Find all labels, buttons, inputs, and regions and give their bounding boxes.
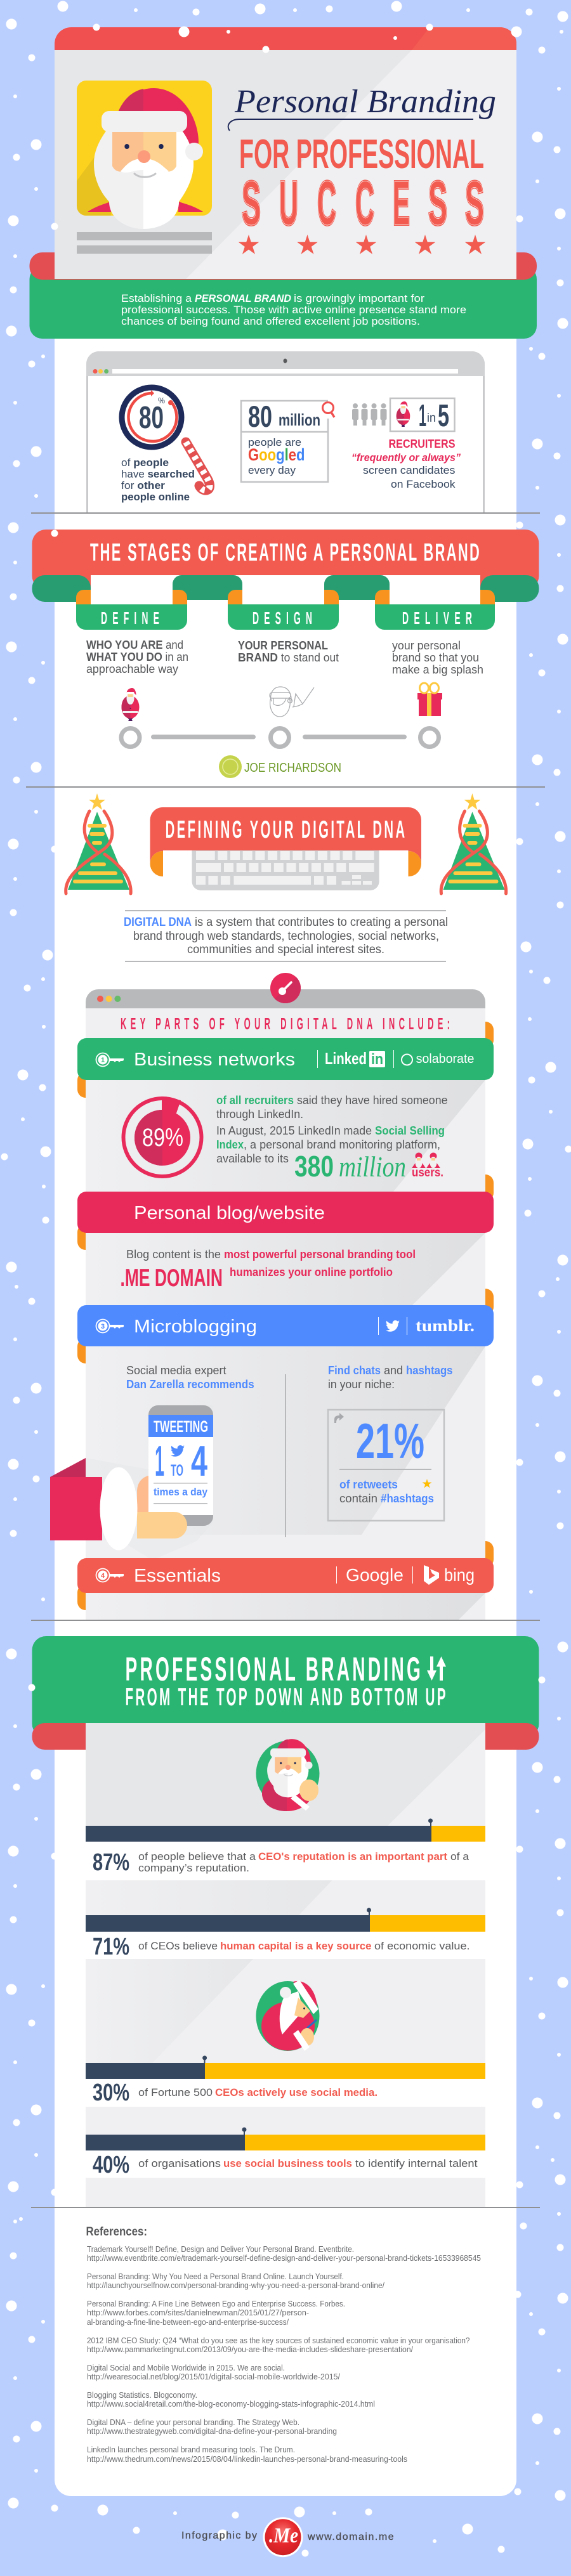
dna definition	[124, 910, 448, 962]
stat: 80 million: 80	[248, 400, 272, 433]
ribbon: essentials	[77, 1558, 494, 1593]
references	[86, 2225, 481, 2464]
stat: 21 percent: 21%	[356, 1413, 424, 1469]
stat: 80 percent: %	[158, 396, 165, 405]
panel: header	[29, 27, 537, 339]
icon: keyboard	[192, 850, 379, 890]
phone	[148, 1405, 213, 1526]
references heading: References:	[86, 2225, 147, 2239]
title: success: C	[355, 168, 374, 238]
stat: 40 percent: 40%	[93, 2152, 129, 2178]
stat: 71 percent: of economic value.	[374, 1940, 469, 1952]
stat: 80 million: million	[279, 410, 320, 429]
linkedin text: available to its	[216, 1152, 289, 1165]
icon: key 3: 3	[101, 1323, 105, 1330]
footer credit: www.domain.me	[307, 2532, 394, 2542]
header red top band	[55, 27, 516, 50]
ribbon: microblogging	[77, 1305, 494, 1346]
stat: 380 million users	[294, 1150, 443, 1183]
chart panel 2	[86, 1880, 485, 1932]
header ribbon green back	[29, 266, 537, 339]
header ribbon red flaps	[29, 252, 537, 280]
stat: 80 percent	[121, 387, 209, 503]
title: success: C	[317, 168, 336, 238]
panel: professional branding	[32, 1636, 539, 2208]
niche text: in your niche:	[328, 1378, 395, 1391]
stat: 80 million: people are	[248, 436, 301, 448]
chart panel 4	[86, 2107, 485, 2150]
deliver text: your personal	[392, 639, 461, 652]
references list: al-branding-a-fine-line-between-ego-and-enterprise-success/	[87, 2318, 289, 2327]
chart panel 3	[86, 1959, 485, 2079]
stat: 89 percent donut: 89%	[142, 1124, 183, 1152]
ribbon: microblogging: Microblogging	[134, 1317, 257, 1337]
stat: 40 percent	[93, 2152, 478, 2178]
blog text	[121, 1248, 416, 1292]
linkedin text: In August, 2015 LinkedIn made	[216, 1124, 372, 1137]
references list: Blogging Statistics. Blogconomy.	[87, 2391, 197, 2400]
stat: 80 percent: for other	[121, 479, 165, 491]
panel: digital dna	[66, 793, 506, 962]
linkedin text	[216, 1094, 448, 1165]
chart panel 5	[86, 2178, 485, 2208]
linkedin text: through LinkedIn.	[216, 1108, 303, 1121]
references list	[87, 2245, 481, 2464]
title: success: S	[428, 168, 447, 238]
title script: Personal Branding	[234, 84, 496, 120]
banner heading: PROFESSIONAL BRANDING	[126, 1651, 421, 1688]
niche text: hashtags	[406, 1364, 453, 1377]
dna banner	[150, 807, 421, 876]
dna definition: communities and special interest sites.	[187, 943, 384, 956]
intro text: professional success. Those with active online presence stand more	[121, 304, 466, 316]
define text	[86, 639, 188, 675]
title: success	[242, 168, 484, 238]
stat: 71 percent	[93, 1934, 469, 1960]
stat: 1 in 5 recruiters: in	[427, 412, 436, 425]
stat: 80 million: Googled	[248, 445, 305, 464]
references list: Digital DNA – define your personal branding. The Strategy Web.	[87, 2418, 299, 2427]
blog text: .ME DOMAIN	[121, 1265, 223, 1292]
stage label: deliver: DELIVER	[402, 608, 472, 628]
stage label: design	[228, 604, 339, 630]
icon: hand holding phone	[50, 1405, 213, 1560]
title: success: U	[279, 168, 298, 238]
define text: WHAT YOU DO in an	[86, 651, 188, 663]
stages banner: THE STAGES OF CREATING A PERSONAL BRAND	[90, 538, 480, 566]
avatar: santa waving	[256, 1739, 320, 1811]
logo: .me: .Me	[269, 2524, 298, 2547]
portrait card: santa	[77, 81, 212, 229]
phone: TO	[171, 1462, 183, 1480]
ribbon: business networks: Business networks	[134, 1050, 295, 1070]
logo: joe richardson	[219, 755, 341, 778]
icon: dna tree left	[66, 793, 131, 894]
references list: http://www.thedrum.com/news/2015/08/04/linkedin-launches-personal-brand-measuring-tools	[87, 2455, 407, 2464]
banner back	[32, 1636, 539, 1738]
stat: 87 percent: of people believe that a	[138, 1851, 256, 1863]
define text: approachable way	[86, 663, 178, 675]
niche text: Find chats	[328, 1364, 381, 1377]
stat: 87 percent: 87%	[93, 1849, 129, 1876]
tweet recommendation text	[126, 1364, 254, 1391]
define text: WHO YOU ARE and	[86, 639, 183, 651]
stat: 1 in 5 recruiters: on Facebook	[391, 478, 456, 490]
stat: 1 in 5 recruiters: 1	[419, 399, 426, 433]
references list: Personal Branding: A Fine Line Between Ego and Enterprise Success. Forbes.	[87, 2300, 345, 2308]
references list: Trademark Yourself! Define, Design and Deliver Your Personal Brand. Eventbrite.	[87, 2245, 354, 2254]
deliver text: make a big splash	[392, 663, 483, 676]
stat: 89 percent donut	[123, 1097, 202, 1176]
linkedin text: Index	[216, 1138, 244, 1151]
banner heading: FROM THE TOP DOWN AND BOTTOM UP	[126, 1683, 446, 1711]
phone: 4	[191, 1437, 207, 1485]
panel: header: S	[465, 168, 484, 238]
blog text: Blog content is the	[126, 1248, 221, 1261]
icon: key 3	[96, 1319, 124, 1333]
title: success: S	[242, 168, 261, 238]
references list: http://launchyourselfnow.com/personal-branding-why-you-need-a-personal-brand-online/	[87, 2281, 384, 2290]
stat: 80 percent: have searched	[121, 468, 195, 480]
ribbon: business networks: solaborate	[416, 1052, 474, 1066]
stat: 1 in 5 recruiters: RECRUITERS	[388, 438, 456, 450]
ribbon: personal blog	[77, 1192, 494, 1233]
icon: key 1: 1	[101, 1057, 105, 1064]
stat: 21 percent: contain	[339, 1492, 377, 1505]
references list: LinkedIn launches personal brand measuring tools. The Drum.	[87, 2445, 295, 2454]
phone: 1	[155, 1437, 164, 1485]
references list: Personal Branding: Why You Need a Personal Brand Online. Launch Yourself.	[87, 2272, 344, 2281]
panel: key parts browser	[50, 973, 494, 1620]
niche text: and	[384, 1364, 403, 1377]
banner red flaps	[32, 1723, 539, 1750]
linkedin text: , a personal brand monitoring platform,	[244, 1138, 440, 1151]
icon: sketched santa	[270, 687, 314, 717]
stat: 71 percent: human capital is a key source	[220, 1940, 372, 1952]
stat: 30 percent: CEOs actively use social media.	[215, 2086, 377, 2098]
ribbon: business networks: in	[371, 1051, 383, 1068]
phone: TWEETING	[154, 1418, 208, 1436]
linkedin text: said they have hired someone	[297, 1094, 448, 1107]
stat: 80 percent: of people	[121, 457, 169, 469]
stat: 21 percent	[328, 1410, 444, 1521]
stat: 87 percent: company’s reputation.	[138, 1862, 249, 1874]
title: success: C	[317, 168, 336, 238]
white card	[55, 27, 516, 2496]
references list: http://www.social4retail.com/the-blog-economy-blogging-stats-infographic-2014.html	[87, 2400, 375, 2409]
ribbon: essentials: Essentials	[134, 1566, 221, 1586]
chart panel 1	[86, 1723, 485, 1842]
icon: gift	[417, 683, 442, 716]
panel: laptop stats	[86, 351, 485, 513]
stat: 21 percent: of retweets	[339, 1478, 398, 1491]
design text: YOUR PERSONAL	[238, 639, 328, 652]
references list: http://www.forbes.com/sites/danielnewman/2015/01/27/person-	[87, 2308, 309, 2317]
linkedin text: Social Selling	[375, 1124, 445, 1137]
phone: times a day	[154, 1486, 207, 1498]
dna definition: DIGITAL DNA	[124, 916, 192, 929]
browser body	[86, 1005, 485, 1620]
stat: 80 percent: 80	[139, 401, 164, 435]
title: success: E	[393, 168, 410, 238]
icon: key 4: 4	[101, 1572, 105, 1580]
stat: 87 percent: CEO's reputation is an important part	[258, 1851, 447, 1863]
deliver text	[392, 639, 483, 676]
title: success: C	[355, 168, 374, 238]
stage label: define: DEFINE	[101, 608, 159, 628]
icon: santa	[122, 688, 140, 721]
dna definition: is a system that contributes to creating a personal	[195, 916, 448, 929]
stat: 40 percent: of organisations	[138, 2157, 221, 2169]
dna definition: brand through web standards, technologies, social networks,	[133, 930, 439, 943]
stat: 380 million users: 380	[294, 1150, 334, 1183]
stars	[239, 235, 485, 254]
deliver text: brand so that you	[392, 651, 479, 664]
stat: 30 percent: 30%	[93, 2079, 129, 2106]
design text: BRAND to stand out	[238, 651, 339, 664]
icon: key badge	[270, 973, 301, 1003]
blog text: most powerful personal branding tool	[224, 1248, 416, 1261]
timeline	[121, 728, 439, 747]
icon: key 4	[96, 1569, 124, 1582]
stat: 1 in 5 recruiters: 5	[438, 399, 449, 433]
intro text: chances of being found and offered excellent job positions.	[121, 315, 420, 327]
icon: dna tree right	[441, 793, 506, 894]
bar: 71 percent	[86, 1908, 485, 1932]
stat: 87 percent: of a	[450, 1851, 469, 1863]
stage label: define	[76, 604, 187, 630]
niche text	[328, 1364, 453, 1391]
footer credit	[181, 2517, 394, 2557]
linkedin text: of all recruiters	[216, 1094, 294, 1107]
stat: 1 in 5 recruiters: “frequently or always”	[351, 452, 461, 464]
key parts heading: KEY PARTS OF YOUR DIGITAL DNA INCLUDE:	[121, 1015, 450, 1033]
blog text: humanizes your online portfolio	[230, 1266, 393, 1278]
stat: 30 percent	[93, 2079, 377, 2106]
stat: 71 percent: of CEOs believe	[138, 1940, 218, 1952]
panel: header: S	[465, 168, 484, 238]
intro text: is growingly important for	[294, 292, 424, 304]
ribbon: essentials: Google	[346, 1565, 404, 1585]
header grey panel	[55, 50, 516, 279]
portrait name lines	[77, 232, 212, 254]
intro text: PERSONAL BRAND	[195, 292, 291, 304]
footer credit: Infographic by	[181, 2530, 257, 2541]
stage label: deliver	[375, 604, 495, 630]
stat: 40 percent: to identify internal talent	[355, 2157, 478, 2169]
ribbon: essentials: bing	[444, 1565, 475, 1585]
stat: 40 percent: use social business tools	[223, 2157, 352, 2169]
dna banner: DEFINING YOUR DIGITAL DNA	[166, 816, 405, 843]
browser title bar	[86, 989, 485, 1008]
ribbon: business networks	[77, 1038, 494, 1080]
stat: 80 million	[241, 400, 334, 482]
stages banner	[32, 530, 539, 604]
tweet recommendation text: Dan Zarella recommends	[126, 1378, 254, 1391]
stat: 80 million: every day	[248, 464, 296, 476]
ribbon shadows	[86, 1080, 485, 1620]
title: success: E	[393, 168, 410, 238]
bar: 87 percent	[86, 1819, 485, 1842]
bar: 40 percent	[86, 2127, 485, 2150]
references list: http://www.thestrategyweb.com/digital-dna-define-your-personal-branding	[87, 2427, 337, 2436]
stat: 380 million users: million	[339, 1150, 406, 1183]
tweet recommendation text: Social media expert	[126, 1364, 226, 1377]
stat: 30 percent: of Fortune 500	[138, 2086, 213, 2098]
references list: http://www.eventbrite.com/e/trademark-yourself-define-design-and-deliver-your-personal-brand-tickets-16533968545	[87, 2254, 481, 2263]
design text	[238, 639, 339, 664]
references list: http://wearesocial.net/blog/2015/01/digital-social-mobile-worldwide-2015/	[87, 2372, 341, 2381]
title: success: U	[279, 168, 298, 238]
references list: 2012 IBM CEO Study: Q24 “What do you see as the key sources of sustained economic value in your organisation?	[87, 2336, 470, 2345]
ribbon: personal blog: Personal blog/website	[134, 1203, 325, 1223]
stat: 1 in 5 recruiters	[351, 398, 461, 490]
intro text	[121, 292, 466, 327]
stat: 87 percent	[93, 1849, 469, 1876]
ribbon: business networks: Linked	[325, 1049, 367, 1068]
ribbon: microblogging: tumblr.	[416, 1317, 475, 1335]
orange ribbon folds	[77, 1022, 494, 1610]
stat: 21 percent: #hashtags	[381, 1492, 434, 1505]
stat: 71 percent: 71%	[93, 1934, 129, 1960]
references list: http://www.pammarketingnut.com/2013/09/you-are-the-media-includes-slideshare-presentation/	[87, 2345, 414, 2354]
stage label: design: DESIGN	[253, 608, 312, 628]
stat: 1 in 5 recruiters: screen candidates	[363, 464, 456, 476]
icon: key 1	[96, 1053, 124, 1067]
logo: .me	[263, 2517, 303, 2557]
banner heading	[126, 1651, 446, 1711]
stat: 380 million users: users.	[412, 1166, 443, 1180]
intro text: Establishing a	[121, 292, 192, 304]
logo: joe richardson: JOE RICHARDSON	[244, 761, 341, 775]
avatar: santa writing	[256, 1980, 320, 2051]
panel: stages	[32, 530, 539, 778]
bar: 30 percent	[86, 2056, 485, 2079]
title: success: S	[242, 168, 261, 238]
laptop frame	[86, 351, 485, 513]
stat: 80 percent: people online	[121, 491, 190, 503]
title: success: S	[428, 168, 447, 238]
references list: Digital Social and Mobile Worldwide in 2015. We are social.	[87, 2364, 285, 2372]
